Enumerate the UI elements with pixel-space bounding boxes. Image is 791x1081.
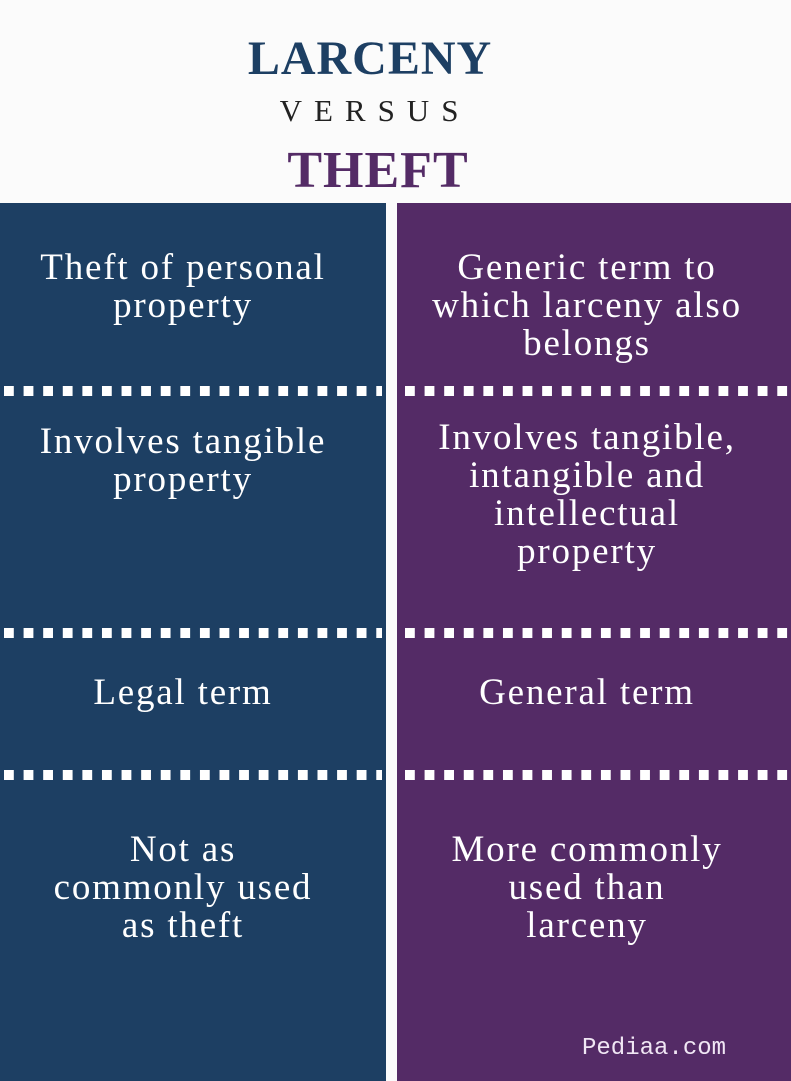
- larceny row 1 text: [40, 247, 326, 326]
- larceny row 4 text: [54, 829, 312, 946]
- larceny row 4 text: as theft: [122, 905, 244, 946]
- larceny row 1 text: property: [113, 285, 253, 326]
- theft row 2 text: intellectual: [494, 493, 680, 534]
- larceny row 4 text: Not as: [130, 829, 236, 870]
- theft row 3 text: General term: [479, 672, 695, 713]
- title: THEFT: THEFT: [287, 142, 469, 199]
- theft row 2 text: property: [517, 531, 657, 572]
- larceny row 2 text: Involves tangible: [40, 421, 326, 462]
- title: LARCENY: LARCENY: [248, 32, 492, 85]
- larceny row 2 text: property: [113, 459, 253, 500]
- theft row 1 text: belongs: [523, 323, 651, 364]
- larceny row 2 text: [40, 421, 326, 500]
- theft row 4 text: [451, 829, 723, 946]
- theft row 1 text: [432, 247, 742, 364]
- theft row 1 text: Generic term to: [457, 247, 717, 288]
- panel: larceny column: [0, 203, 386, 1081]
- theft row 4 text: larceny: [526, 905, 648, 946]
- theft row 2 text: intangible and: [469, 455, 705, 496]
- theft row 1 text: which larceny also: [432, 285, 742, 326]
- theft row 2 text: [438, 417, 736, 572]
- theft row 2 text: Involves tangible,: [438, 417, 736, 458]
- larceny row 1 text: Theft of personal: [40, 247, 326, 288]
- subtitle: VERSUS: VERSUS: [280, 93, 470, 128]
- panel: theft column: [397, 203, 791, 1081]
- larceny row 4 text: commonly used: [54, 867, 312, 908]
- theft row 4 text: More commonly: [451, 829, 723, 870]
- larceny row 3 text: Legal term: [93, 672, 273, 713]
- theft row 4 text: used than: [508, 867, 665, 908]
- logo: Pediaa.com: Pediaa.com: [582, 1035, 726, 1062]
